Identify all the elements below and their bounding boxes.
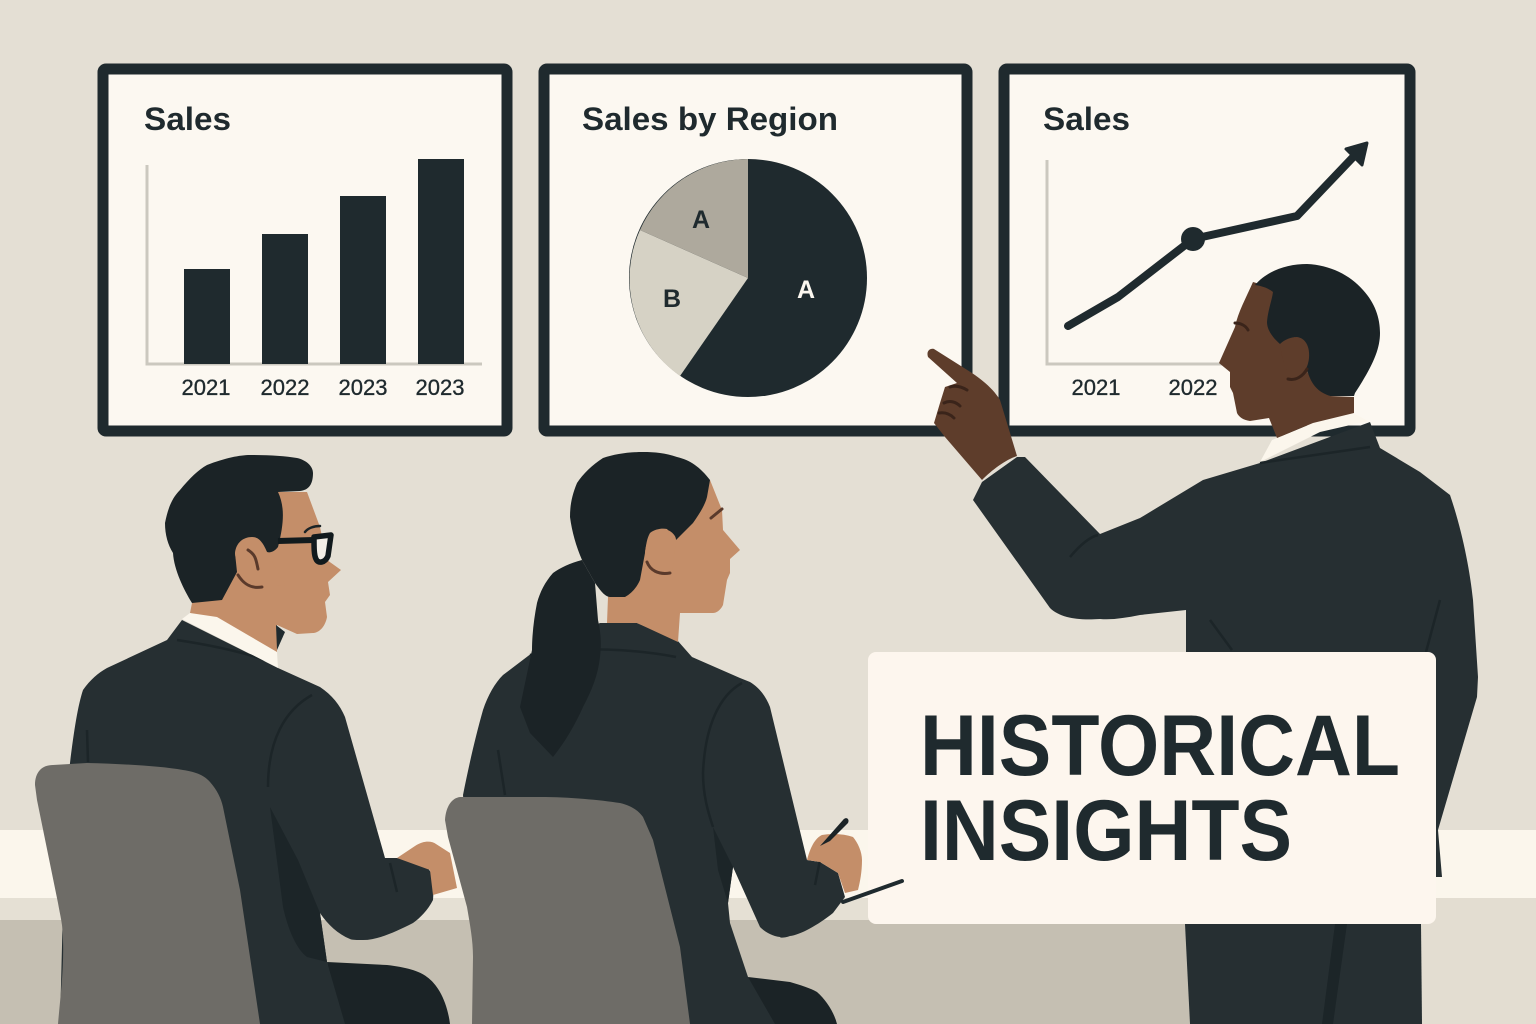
- year labels: [1072, 375, 1217, 400]
- callout: title card: [868, 652, 1436, 924]
- line with arrow: [1068, 143, 1367, 326]
- bar labels: 2021: [182, 375, 230, 400]
- jacket: [60, 620, 434, 1024]
- leg shadow: [1322, 924, 1347, 1024]
- person: seated woman: [463, 452, 845, 1024]
- legs: [1185, 924, 1422, 1024]
- jacket seams: [498, 649, 820, 885]
- year labels: 2021: [1072, 375, 1120, 400]
- hand pointing: [927, 349, 1017, 480]
- heading: Sales: Sales: [1043, 101, 1130, 137]
- ear: [1280, 337, 1309, 378]
- hair: [165, 455, 313, 603]
- panel: pie chart screen: [544, 69, 967, 431]
- title line one: HISTORICAL: [920, 698, 1400, 794]
- hair: [1255, 264, 1380, 396]
- panel: line chart screen: [1004, 69, 1410, 431]
- collar: [1260, 413, 1368, 462]
- table and floor: [0, 830, 1536, 1024]
- panel: bar chart screen: [103, 69, 507, 431]
- person: presenter: [927, 264, 1478, 1024]
- ear shadow and brow: [1235, 323, 1307, 379]
- body and arm: [973, 422, 1478, 924]
- ear: [235, 537, 285, 587]
- bar labels: 2022: [261, 375, 309, 400]
- pants: [327, 962, 450, 1024]
- axes: [1047, 160, 1240, 364]
- chair: center: [445, 797, 690, 1024]
- bar labels: 2023: [339, 375, 387, 400]
- chart axes: [147, 165, 482, 364]
- jacket: [463, 623, 845, 1024]
- pie chart: A: [692, 206, 710, 234]
- chair: left: [35, 763, 260, 1024]
- ear details: [238, 550, 262, 587]
- bar labels: [182, 375, 464, 400]
- bars: [184, 159, 464, 364]
- hand: [397, 842, 457, 895]
- ponytail: [520, 560, 601, 757]
- jacket seams: [87, 640, 397, 892]
- ear: [645, 529, 676, 574]
- bar labels: 2023: [416, 375, 464, 400]
- neck and face: [607, 480, 740, 642]
- woman's hand, pen and tablet: [807, 818, 902, 902]
- neck shadow: [276, 625, 285, 650]
- jacket shadow: [713, 827, 733, 903]
- neck and face: [190, 492, 341, 653]
- hair: [570, 452, 710, 597]
- jacket shadow: [270, 807, 327, 962]
- ear shadow and brow: [647, 509, 722, 573]
- pie chart: A: [797, 276, 815, 304]
- neck and face: [1219, 282, 1354, 438]
- glasses: [278, 526, 331, 562]
- pie chart: B: [663, 285, 681, 313]
- year labels: 2022: [1169, 375, 1217, 400]
- title line two: INSIGHTS: [920, 783, 1292, 879]
- heading: Sales: Sales: [144, 101, 231, 137]
- person: seated man with glasses: [60, 455, 457, 1024]
- heading: Sales by Region: Sales by Region: [582, 101, 838, 137]
- pants: [748, 977, 837, 1024]
- seams: [1070, 447, 1440, 652]
- collar: [182, 613, 278, 668]
- pie chart: [629, 159, 867, 397]
